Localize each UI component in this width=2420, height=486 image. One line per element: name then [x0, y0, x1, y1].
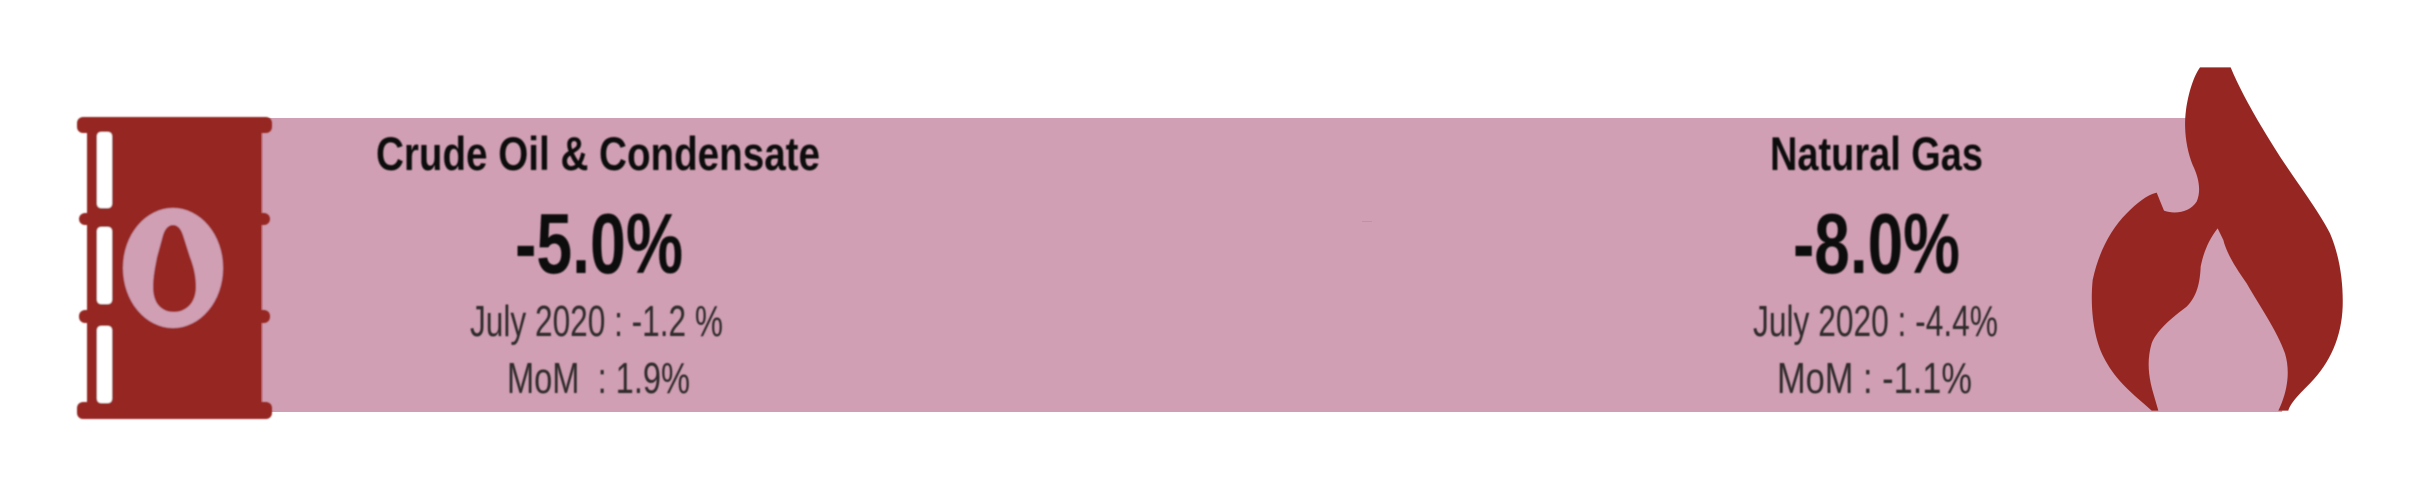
value: natural gas change: -8.0%: [1793, 197, 1960, 292]
icon: flame: [2092, 67, 2343, 411]
detail: crude oil MoM: MoM : 1.9%: [507, 354, 690, 403]
oval badge: [123, 208, 223, 328]
highlight slots: [97, 132, 112, 403]
oil drop: [153, 225, 196, 312]
detail: natural gas July 2020: July 2020 : -4.4%: [1753, 297, 1998, 346]
heading: crude oil: Crude Oil & Condensate: [376, 127, 820, 180]
text block: natural gas: [1753, 127, 1998, 403]
barrel bottom rim: [77, 402, 272, 419]
detail: natural gas MoM: MoM : -1.1%: [1777, 354, 1972, 403]
barrel body: [87, 120, 262, 416]
icon: oil barrel: [77, 117, 272, 419]
heading: natural gas: Natural Gas: [1770, 127, 1983, 180]
barrel top rim: [77, 117, 272, 133]
upper hoop: [79, 213, 270, 225]
value: crude oil change: -5.0%: [515, 197, 683, 292]
lower hoop: [79, 310, 270, 323]
text block: crude oil and condensate: [376, 127, 820, 403]
panel: pink band: [262, 118, 2290, 412]
detail: crude oil July 2020: July 2020 : -1.2 %: [470, 297, 723, 346]
